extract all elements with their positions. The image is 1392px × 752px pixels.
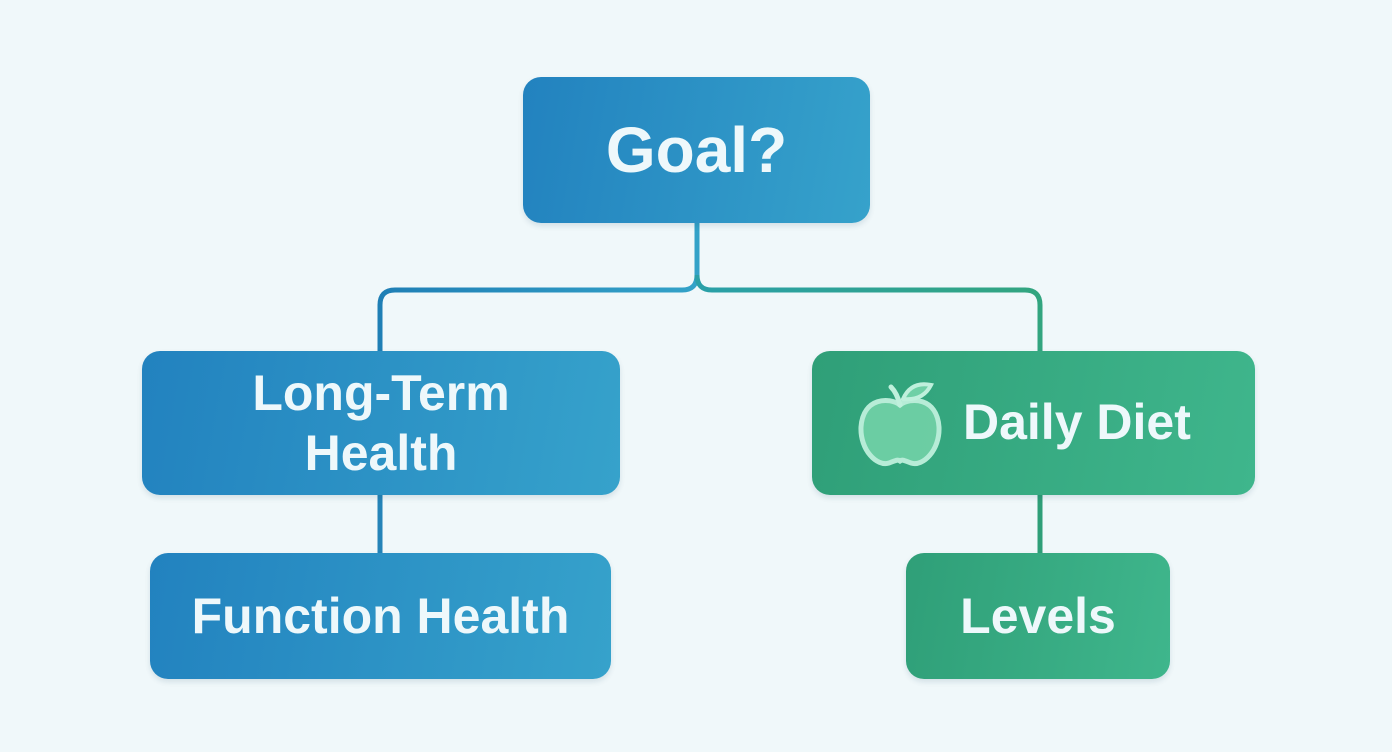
icon: apple xyxy=(858,382,942,466)
box: long-term health xyxy=(142,351,620,495)
label: daily diet: Daily Diet xyxy=(963,394,1191,450)
box: levels xyxy=(906,553,1170,679)
box: goal xyxy=(523,77,870,223)
box: levels: Levels xyxy=(960,588,1116,644)
box: daily diet xyxy=(812,351,1255,495)
box: function health: Function Health xyxy=(192,588,569,644)
box: long-term health: Health xyxy=(305,425,457,481)
box: function health xyxy=(150,553,611,679)
box: long-term health: Long-Term xyxy=(252,365,510,421)
box: goal: Goal? xyxy=(606,114,787,186)
